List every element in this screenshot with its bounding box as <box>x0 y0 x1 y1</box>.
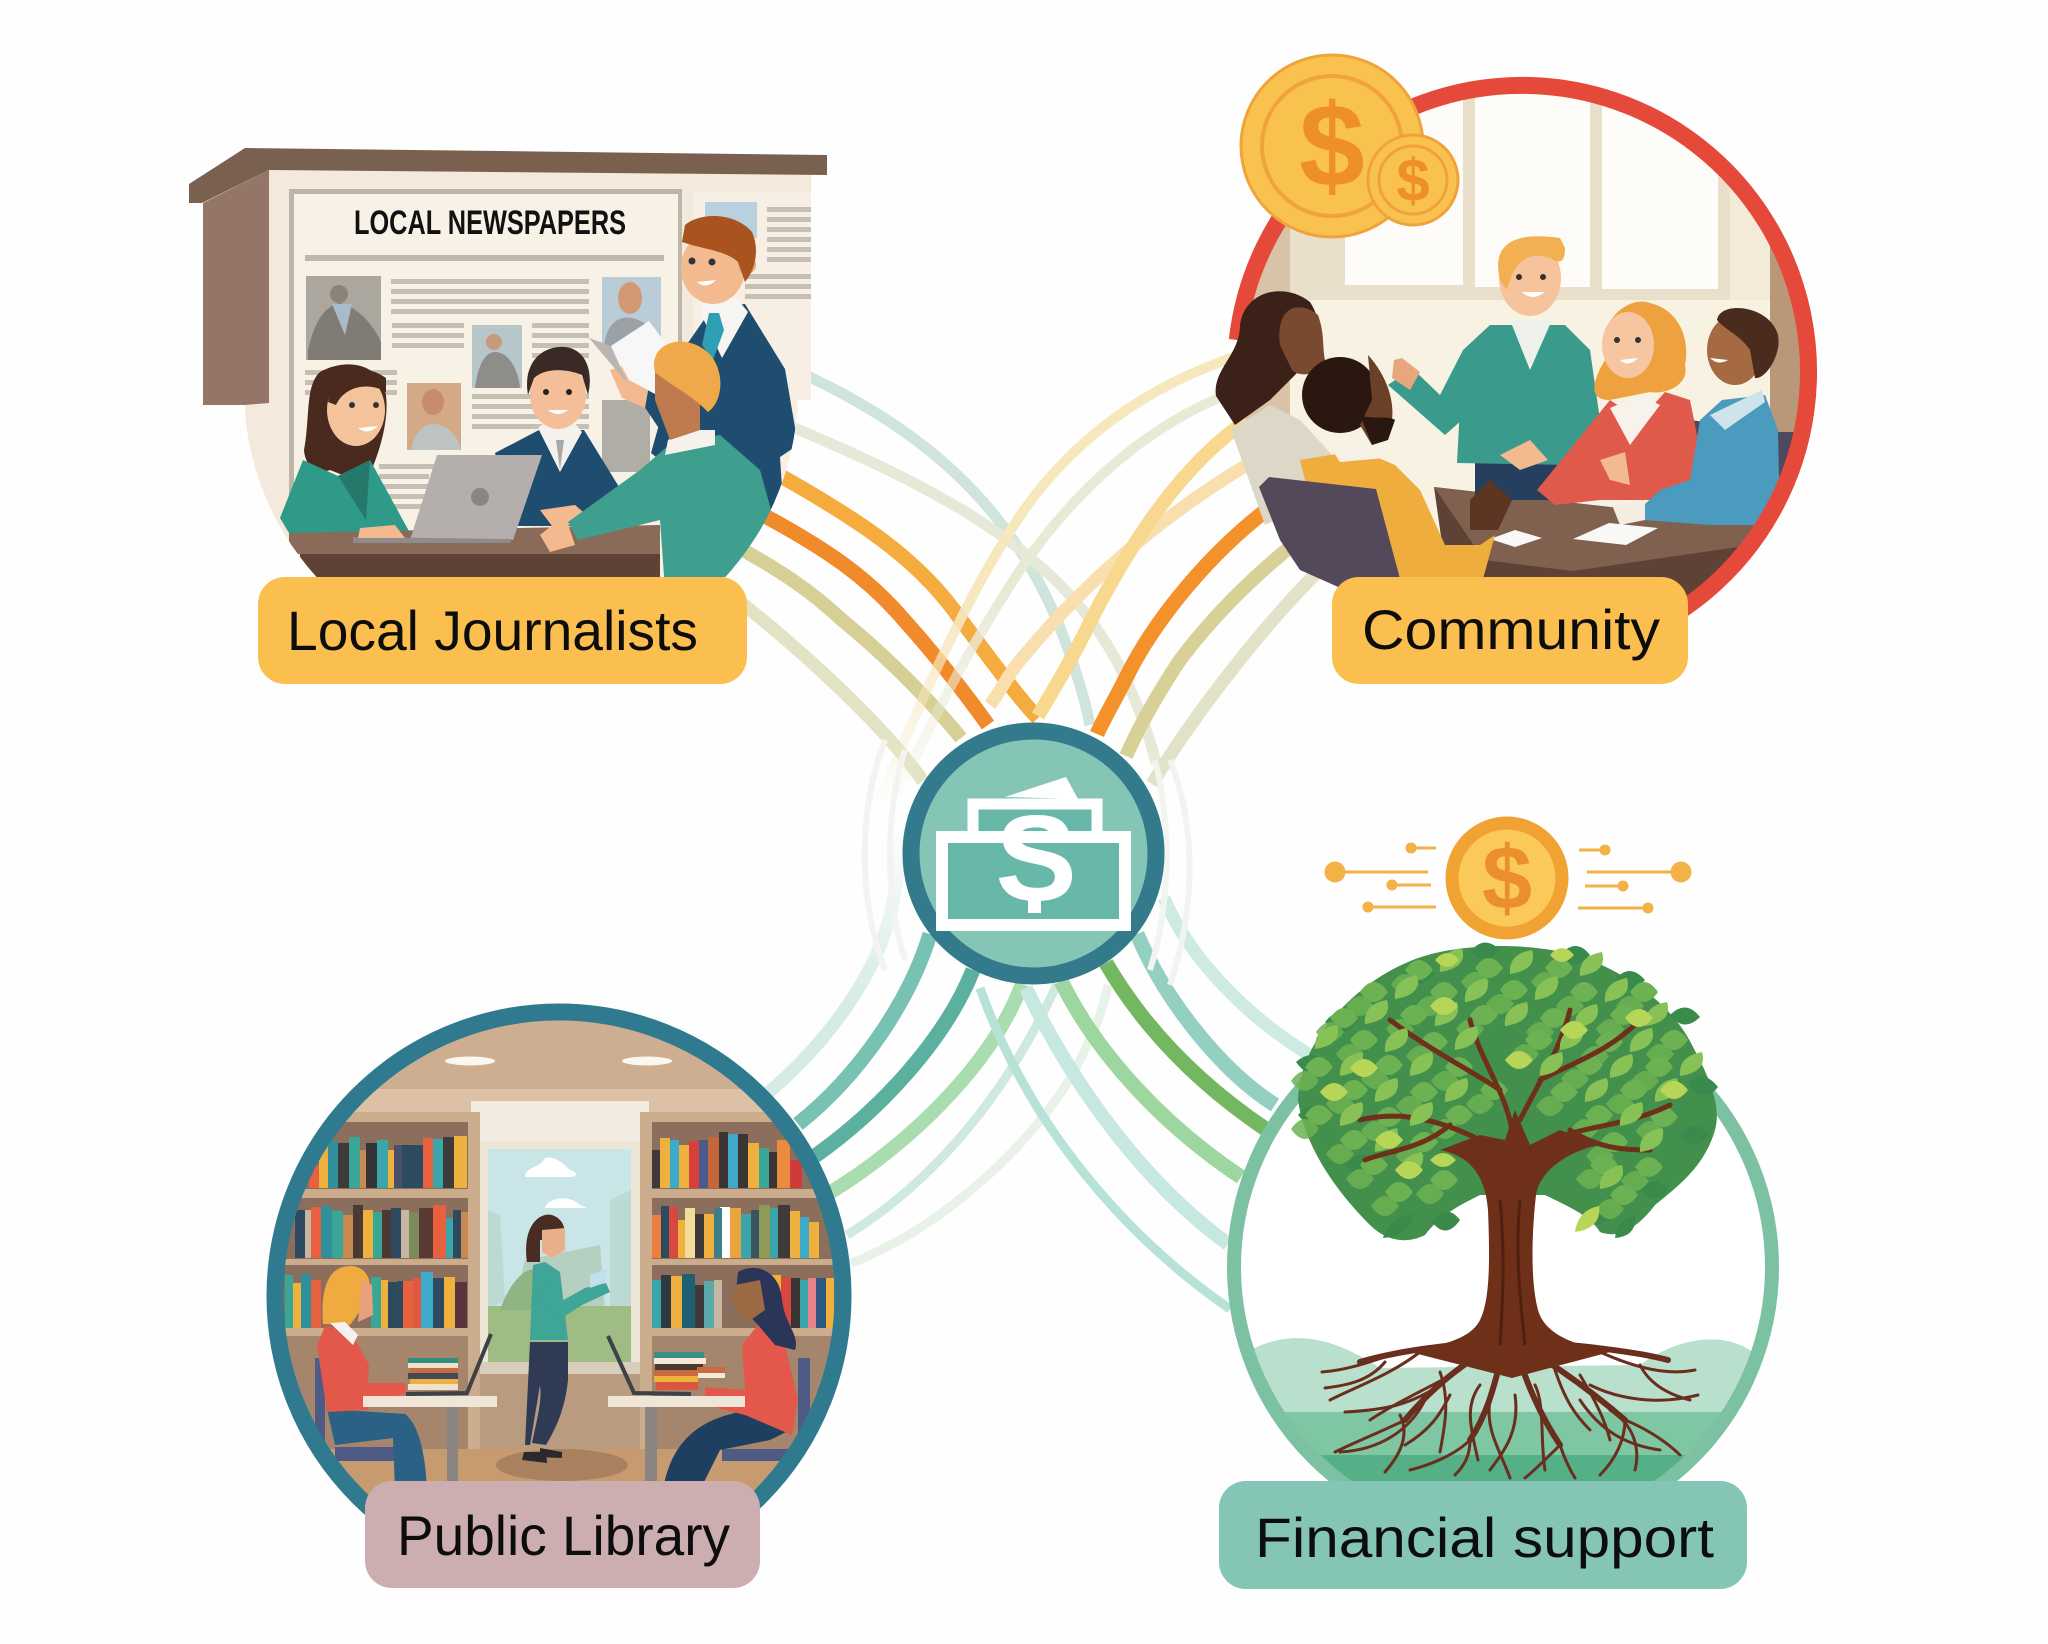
table <box>289 525 660 577</box>
label: local journalists: Local Journalists <box>287 599 698 662</box>
tree circle fill <box>1233 997 1773 1537</box>
ground <box>1240 1338 1780 1490</box>
label: community <box>1332 577 1688 684</box>
teal ring <box>275 1012 843 1580</box>
icon: small coin: $ <box>1396 147 1430 214</box>
masthead rule <box>305 255 664 261</box>
connecting arcs: public library to hub <box>768 820 1108 1263</box>
label: local journalists <box>258 577 747 684</box>
green ring <box>1234 998 1772 1536</box>
connecting arcs: local journalists to hub <box>725 368 1156 781</box>
icon: large coin <box>1241 55 1423 237</box>
newspaper photo: portrait three <box>407 383 461 450</box>
man in blue <box>1612 308 1780 525</box>
laptops <box>406 1334 691 1394</box>
woman at left overlapping ring <box>1216 291 1332 525</box>
icon: large coin: $ <box>1299 80 1365 212</box>
faint halo arcs around hub <box>865 740 1190 985</box>
connecting arcs: financial support to hub <box>980 898 1315 1309</box>
woman with laptop <box>280 364 410 533</box>
central hub: money icon <box>911 731 1156 976</box>
woman in red <box>1537 302 1698 505</box>
laptop <box>353 455 542 543</box>
right reader <box>663 1268 810 1490</box>
left shelf books <box>285 1136 468 1328</box>
tree trunk and branches <box>1360 1010 1670 1378</box>
red ring <box>1237 85 1809 640</box>
chair right <box>1694 420 1794 478</box>
ceiling lights <box>445 1056 672 1066</box>
tree roots <box>1322 1340 1698 1478</box>
papers on table <box>1490 523 1658 547</box>
panel: community <box>1216 54 1818 616</box>
table <box>1434 487 1754 596</box>
bearded man <box>1300 355 1512 590</box>
label: community: Community <box>1362 598 1660 661</box>
left reader <box>315 1266 427 1490</box>
book stacks <box>408 1352 725 1390</box>
panel: financial support <box>1233 823 1780 1537</box>
window <box>480 1141 640 1373</box>
tree crown: mid leaves <box>1291 958 1688 1219</box>
man seen from behind <box>540 342 771 590</box>
panel: public library <box>266 1004 852 1515</box>
panel: local journalists <box>189 148 827 594</box>
building roof <box>189 148 827 203</box>
masthead title: LOCAL NEWSPAPERS <box>354 204 626 242</box>
right bookshelf <box>640 1112 834 1449</box>
librarian <box>522 1215 610 1463</box>
standing man <box>589 216 798 541</box>
connecting arcs: community to hub <box>880 355 1325 800</box>
central hub: money icon: S <box>995 790 1077 926</box>
newspaper photo: top right <box>705 202 757 238</box>
meeting scene <box>1246 98 1800 596</box>
tree crown: light leaves <box>1315 948 1703 1232</box>
label: financial support <box>1219 1481 1747 1589</box>
icon: small coin <box>1368 135 1458 225</box>
label: public library: Public Library <box>397 1504 730 1567</box>
chair in foreground <box>1259 477 1403 590</box>
icon: coin with motion lines: $ <box>1482 829 1532 929</box>
newspaper photo: portrait four <box>602 277 661 346</box>
floor shadow <box>496 1449 628 1481</box>
newspaper photo: portrait one <box>306 276 381 360</box>
library scene <box>284 1020 834 1495</box>
newspaper photo: portrait two <box>472 325 522 388</box>
label: public library <box>365 1481 760 1588</box>
building side wall <box>203 170 269 405</box>
right shelf books <box>652 1132 834 1328</box>
tree crown: dark base <box>1296 942 1718 1240</box>
desks <box>363 1396 745 1487</box>
left bookshelf <box>284 1112 480 1449</box>
seated man <box>495 347 624 530</box>
newspaper text lines <box>305 207 811 509</box>
standing man <box>1388 236 1600 500</box>
label: financial support: Financial support <box>1255 1506 1714 1569</box>
newsroom scene <box>245 170 815 594</box>
icon: coin with motion lines <box>1326 823 1690 933</box>
